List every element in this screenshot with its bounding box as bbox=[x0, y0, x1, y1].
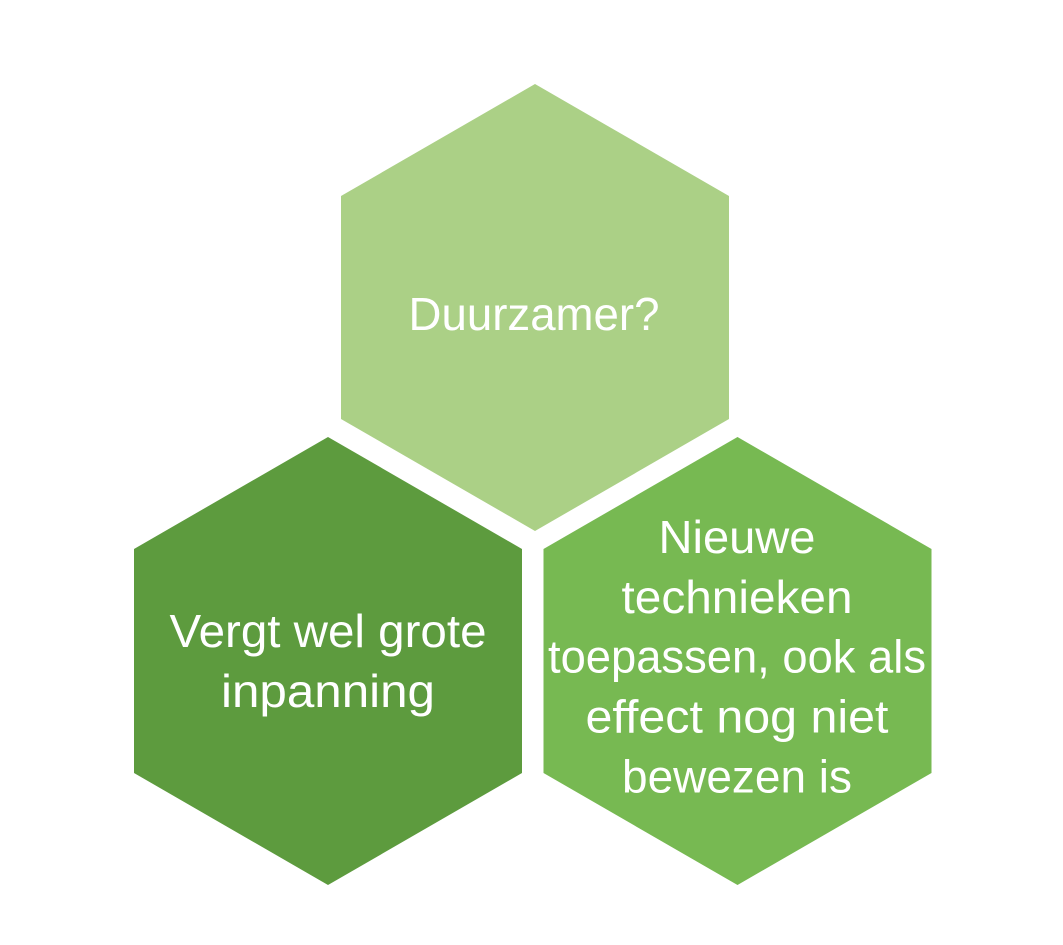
panel: Nieuwe technieken hexagon: effect nog niet bbox=[586, 690, 889, 742]
panel: Vergt wel grote inpanning hexagon: inpanning bbox=[221, 665, 435, 717]
panel: Nieuwe technieken hexagon: Nieuwe bbox=[658, 511, 816, 563]
panel: Vergt wel grote inpanning hexagon: Vergt wel grote bbox=[170, 605, 486, 657]
panel: Nieuwe technieken hexagon bbox=[544, 437, 932, 885]
panel: Nieuwe technieken hexagon: bewezen is bbox=[622, 750, 852, 802]
panel: Duurzamer hexagon: Duurzamer? bbox=[408, 288, 660, 340]
panel: Duurzamer hexagon bbox=[341, 84, 729, 531]
panel: Nieuwe technieken hexagon: technieken bbox=[622, 571, 852, 623]
panel: Vergt wel grote inpanning hexagon bbox=[134, 437, 522, 885]
panel: Nieuwe technieken hexagon: toepassen, ook als bbox=[548, 630, 926, 682]
